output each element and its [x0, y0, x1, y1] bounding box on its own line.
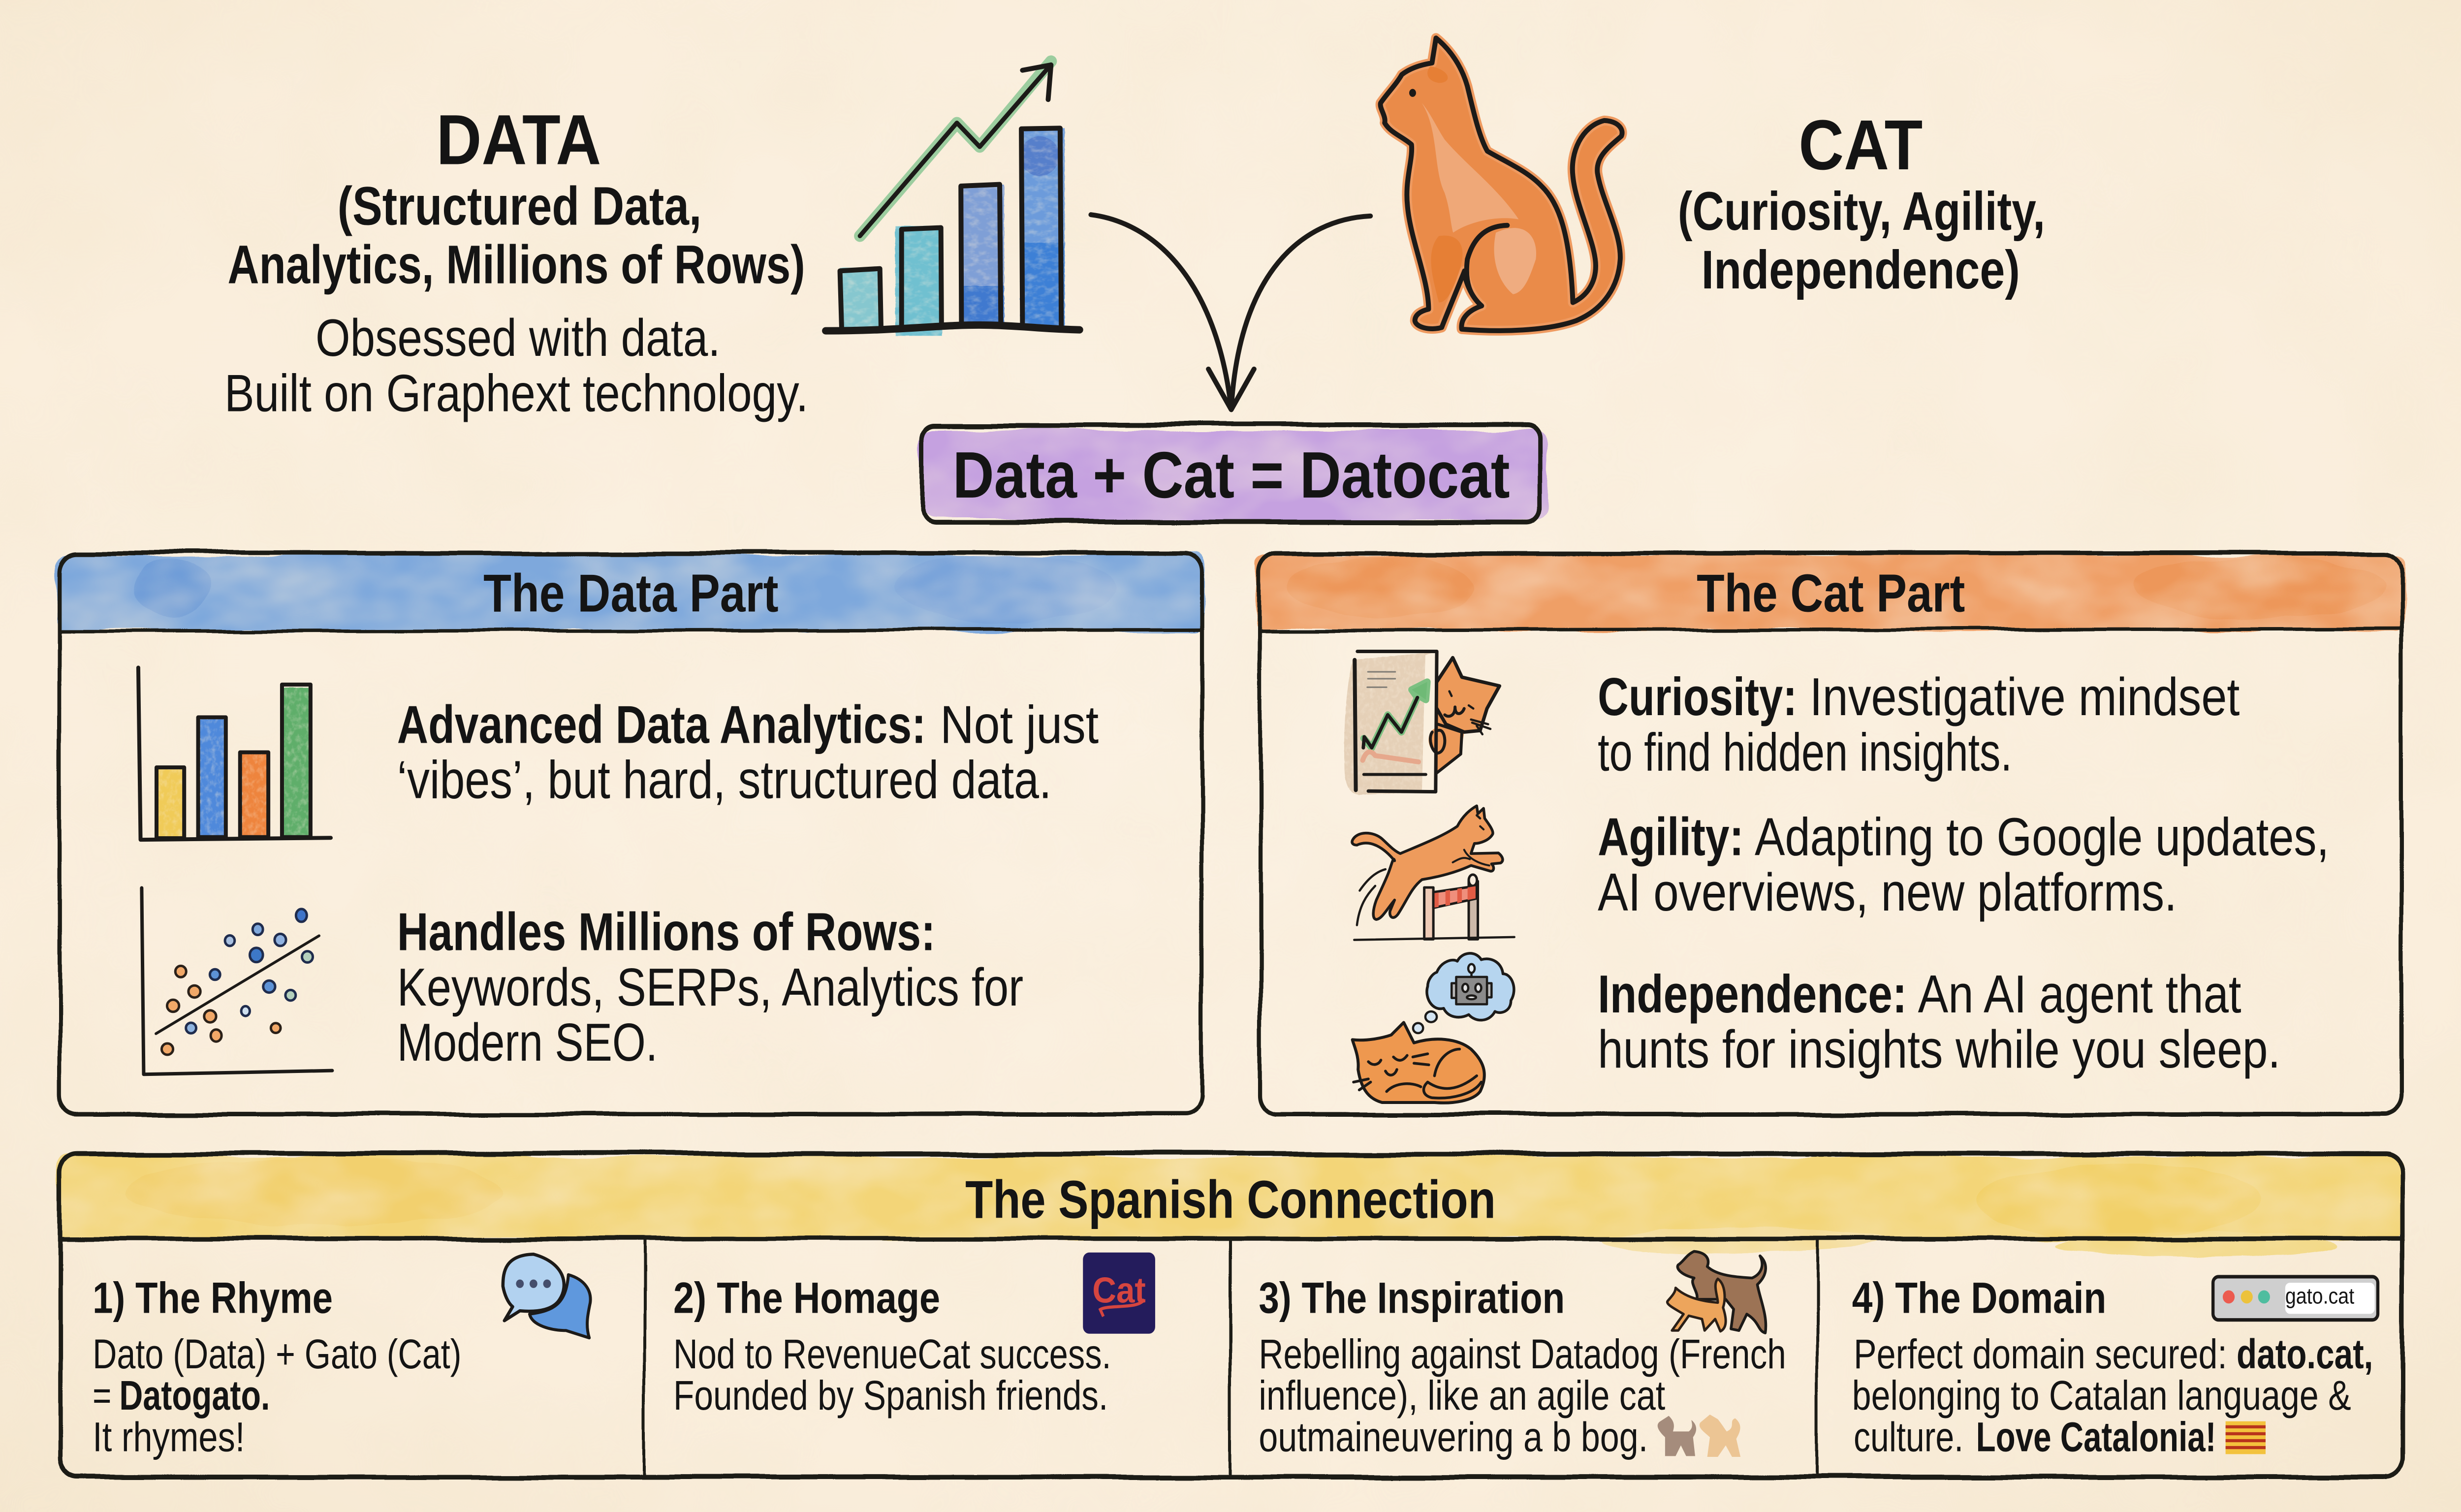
text: independence [1598, 965, 2280, 1079]
panel: the spanish connection [57, 1154, 2404, 1477]
header wash: yellow [57, 1156, 2404, 1256]
header wash: orange [1257, 555, 2404, 630]
text: handles millions of rows: Handles Millions of Rows: [397, 902, 936, 962]
card: the rhyme: Dato (Data) + Gato (Cat) [93, 1331, 462, 1378]
icon: speech bubbles [503, 1254, 591, 1338]
card: the rhyme: = [93, 1373, 111, 1419]
panel outline [60, 1154, 2403, 1477]
heading: The Data Part [483, 564, 779, 624]
panel: the data part [57, 553, 1205, 1114]
card: the domain: belonging to Catalan language & [1852, 1373, 2351, 1419]
description: obsessed with data [224, 308, 808, 422]
text: curiosity: to find hidden insights. [1598, 723, 2012, 783]
card: the homage [673, 1253, 1155, 1419]
text: agility [1598, 807, 2329, 922]
text: agility: AI overviews, new platforms. [1598, 862, 2177, 922]
card: the homage: Founded by Spanish friends. [673, 1373, 1108, 1419]
text: agility: Agility: [1598, 807, 1744, 867]
icon: dog and cat [1667, 1252, 1766, 1333]
block: CAT heading [1678, 106, 2045, 300]
icon: revenuecat logo [1083, 1253, 1155, 1334]
card: the rhyme: Datogato. [119, 1373, 270, 1419]
text: independence: An AI agent that [1918, 965, 2241, 1024]
icon: catalan flag [2226, 1421, 2266, 1454]
subtitle: curiosity agility independence: Independence) [1702, 240, 2020, 300]
text: advanced data analytics: Not just [940, 695, 1099, 755]
icon: cat jumping over hurdle [1352, 806, 1514, 940]
card: the inspiration [1259, 1252, 1786, 1460]
card: the domain: dato.cat, [2237, 1331, 2373, 1378]
text: handles millions of rows: Modern SEO. [397, 1013, 658, 1072]
text: independence: Independence: [1598, 965, 1907, 1024]
subtitle: structured data: (Structured Data, [338, 176, 701, 236]
card: the domain: culture. [1854, 1414, 1963, 1460]
text: curiosity: Curiosity: [1598, 667, 1797, 727]
subtitle: structured data [227, 176, 805, 295]
text: curiosity: Investigative mindset [1810, 667, 2240, 727]
card: the homage: 2) The Homage [673, 1274, 940, 1323]
panel outline [60, 553, 1202, 1114]
description: obsessed with data: Built on Graphext technology. [224, 363, 808, 422]
text: advanced data analytics: Advanced Data Analytics: [397, 695, 926, 755]
title: DATA: DATA [436, 101, 601, 180]
icon: browser address bar [2213, 1277, 2378, 1320]
arrow: merging data and cat [1091, 215, 1370, 410]
icon: bar chart [138, 667, 331, 840]
card: the domain: Perfect domain secured: [1854, 1331, 2227, 1378]
text: handles millions of rows: Keywords, SERPs, Analytics for [397, 958, 1023, 1017]
icon: browser address bar: gato.cat [2285, 1284, 2354, 1309]
icon: big orange cat [1381, 38, 1622, 331]
card: the inspiration: influence), like an agile cat [1259, 1373, 1665, 1419]
card: the homage: Nod to RevenueCat success. [673, 1331, 1111, 1378]
icon: small dog and cat emoji [1658, 1415, 1740, 1457]
heading: The Cat Part [1697, 564, 1965, 624]
heading: The Spanish Connection [965, 1170, 1496, 1230]
card: the domain [1852, 1274, 2378, 1460]
subtitle: structured data: Analytics, Millions of Rows) [227, 234, 805, 295]
subtitle: curiosity agility independence [1678, 181, 2045, 300]
card: the inspiration: Rebelling against Datadog (French [1259, 1331, 1786, 1378]
icon: rising bar chart with arrow [826, 62, 1079, 336]
text: handles millions of rows [397, 902, 1023, 1072]
card: the rhyme: 1) The Rhyme [93, 1274, 333, 1323]
block: DATA heading [224, 101, 808, 422]
text: advanced data analytics [397, 695, 1099, 810]
text: advanced data analytics: ‘vibes’, but hard, structured data. [397, 750, 1051, 810]
icon: scatter plot [142, 888, 332, 1074]
icon: cat peeking behind report [1344, 651, 1500, 795]
icon: revenuecat logo: Cat [1092, 1270, 1146, 1310]
text: curiosity [1598, 667, 2240, 783]
panel: the cat part [1257, 553, 2404, 1114]
card: the rhyme [93, 1254, 591, 1460]
icon: sleeping cat dreaming of robot [1353, 953, 1514, 1103]
card: the domain: 4) The Domain [1852, 1274, 2106, 1323]
header wash: blue [57, 553, 1205, 630]
text: independence: hunts for insights while you sleep. [1598, 1020, 2280, 1079]
text: agility: Adapting to Google updates, [1755, 807, 2329, 867]
card: the domain: Love Catalonia! [1976, 1414, 2216, 1460]
description: obsessed with data: Obsessed with data. [316, 308, 721, 367]
title: CAT: CAT [1798, 106, 1923, 185]
card: the inspiration: outmaineuvering a b bog. [1259, 1414, 1648, 1460]
subtitle: curiosity agility independence: (Curiosity, Agility, [1678, 181, 2045, 242]
card: the inspiration: 3) The Inspiration [1259, 1274, 1565, 1323]
equation box: Data + Cat = Datocat [920, 425, 1547, 522]
panel outline [1261, 553, 2401, 1114]
card: the rhyme: It rhymes! [93, 1414, 245, 1460]
equation box: Data + Cat = Datocat: Data + Cat = Datocat [953, 439, 1510, 512]
